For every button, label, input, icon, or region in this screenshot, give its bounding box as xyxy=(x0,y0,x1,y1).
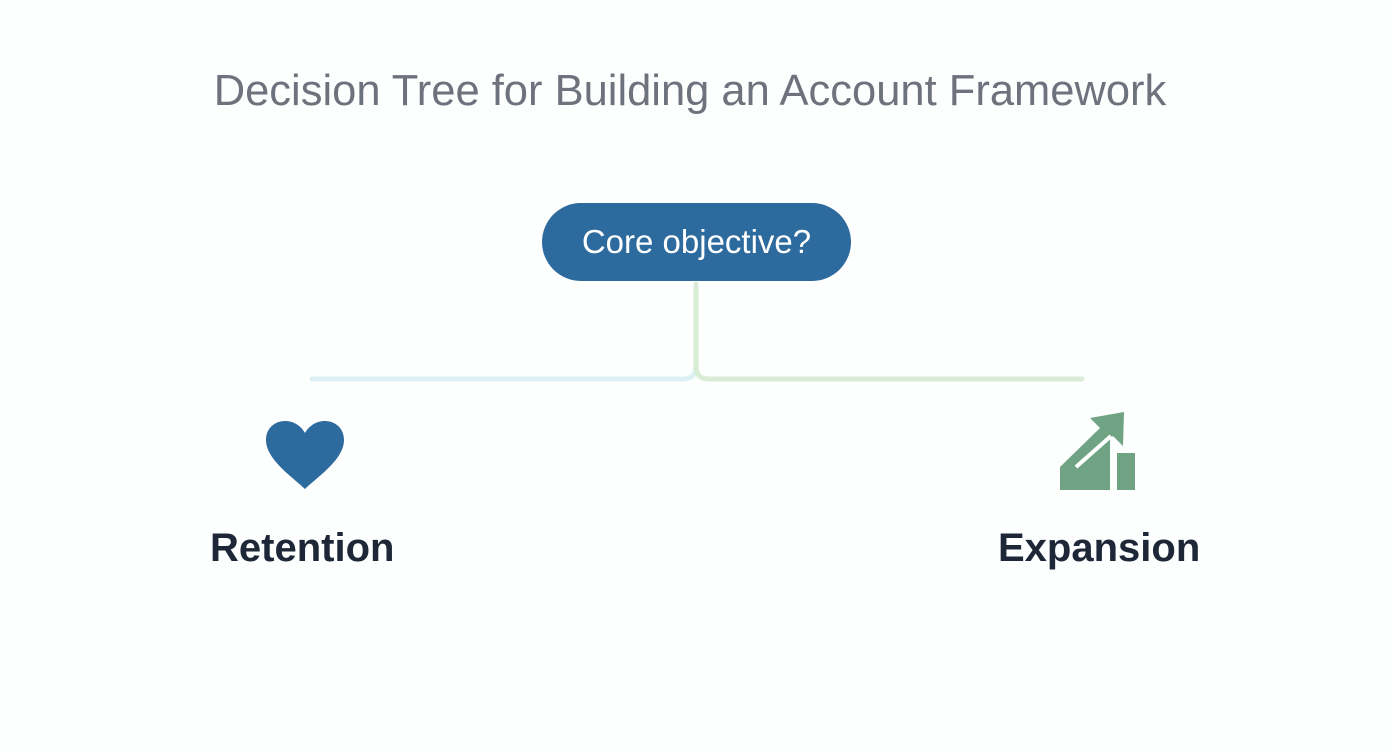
title: Decision Tree for Building an Account Framework xyxy=(214,67,1166,115)
label: Expansion: Expansion xyxy=(998,526,1200,570)
label: Retention: Retention xyxy=(210,526,394,570)
icon: heart xyxy=(266,421,344,489)
decision node: core objective: Core objective? xyxy=(582,223,811,260)
decision node: core objective xyxy=(542,203,851,281)
